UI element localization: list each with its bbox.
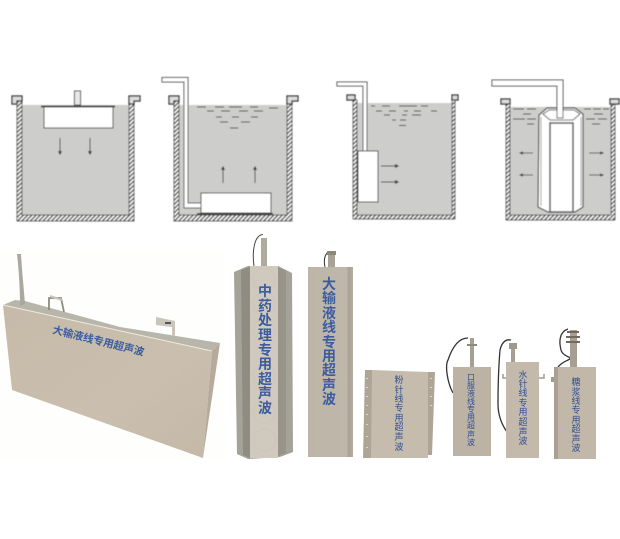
label: 糖浆线专用超声波	[571, 376, 581, 453]
tank walls	[353, 100, 455, 219]
side face	[203, 343, 220, 458]
diagram: tank with top-mounted transducer	[12, 91, 140, 221]
label: 水针线专用超声波	[518, 369, 528, 446]
right dark panel	[278, 267, 286, 456]
photo: syrup-line transducer	[551, 329, 596, 459]
label: 口服液线专用超声波	[467, 373, 475, 447]
body	[453, 367, 491, 456]
centre face	[250, 266, 278, 458]
pipe	[162, 78, 201, 208]
photo background: faded backdrop	[0, 252, 225, 460]
transducer	[201, 193, 271, 213]
cable and finned pipe	[558, 329, 571, 367]
diagram: tank with bottom-mounted transducer	[162, 78, 298, 221]
transducer	[44, 107, 113, 128]
arrows	[381, 164, 398, 184]
body	[371, 370, 428, 458]
tank walls	[174, 101, 292, 221]
body	[234, 266, 293, 459]
cable and pipe	[447, 338, 468, 393]
photo: powder-injection transducer	[363, 370, 435, 458]
pipe	[337, 82, 367, 151]
front face	[3, 305, 212, 458]
photo: water-injection transducer	[498, 340, 544, 458]
label: 大输液线专用超声波	[51, 323, 146, 359]
tank walls	[506, 104, 615, 220]
top face	[3, 300, 220, 351]
photo: octagonal transducer	[234, 234, 293, 459]
pipe	[492, 80, 563, 118]
surface ripples	[513, 109, 609, 124]
arrows	[520, 152, 603, 176]
diagram: tank with side-mounted transducer	[337, 82, 458, 219]
surface ripples	[197, 107, 278, 128]
tank walls	[17, 101, 134, 221]
arrows	[222, 167, 256, 183]
flanges	[363, 370, 435, 458]
pipe	[17, 254, 25, 306]
diagram: tank with central octagonal transducer	[492, 80, 619, 220]
cable and pipe	[253, 234, 263, 266]
photo: large rectangular transducer	[3, 254, 220, 458]
label: 粉针线专用超声波	[394, 374, 404, 452]
body	[554, 367, 596, 459]
body	[506, 362, 539, 458]
surface ripples	[371, 106, 437, 126]
side tab	[551, 377, 554, 382]
body	[308, 267, 353, 457]
pipe	[74, 91, 80, 105]
arrows	[58, 138, 92, 154]
side tabs	[503, 374, 544, 378]
transducer	[358, 151, 378, 202]
octagonal transducer	[538, 108, 583, 212]
bolt holes	[367, 378, 431, 448]
label: 中药处理专用超声波	[258, 283, 272, 416]
handles	[49, 298, 64, 312]
cable and pipe	[324, 252, 331, 267]
cable and pipe	[498, 340, 511, 432]
photo: tall rectangular transducer	[308, 251, 353, 457]
left dark panel	[241, 267, 250, 458]
photo: oral-liquid transducer	[447, 338, 491, 456]
faint circles	[253, 268, 276, 451]
label: 大输液线专用超声波	[322, 276, 336, 407]
